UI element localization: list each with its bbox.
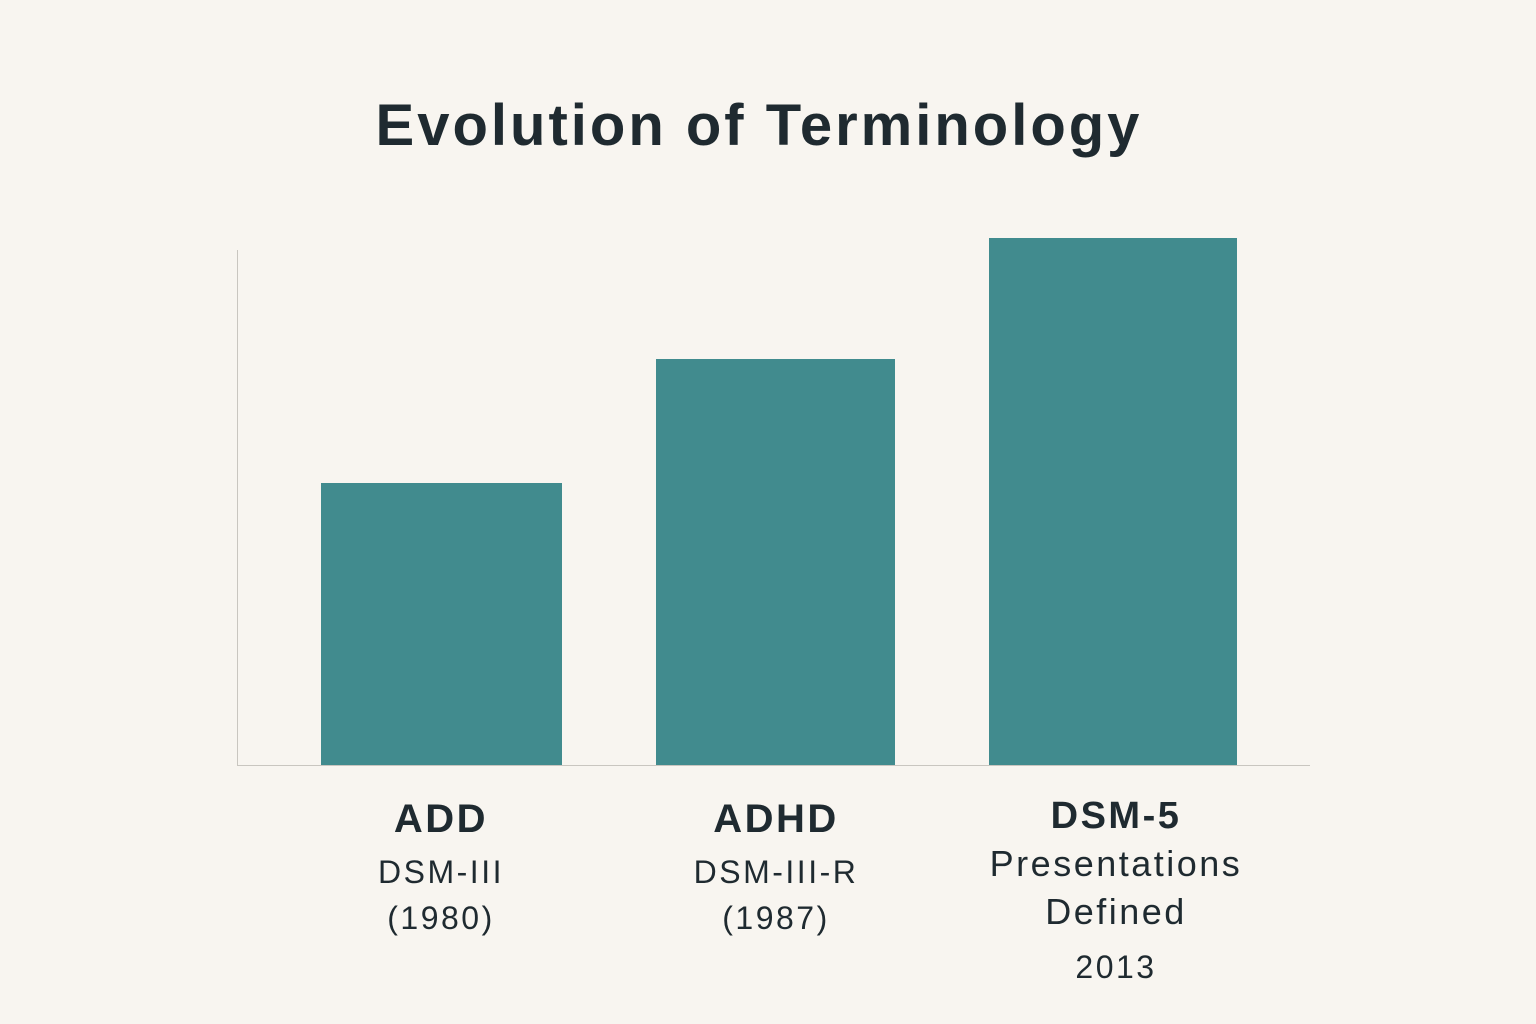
title: Evolution of Terminology (376, 93, 1142, 158)
bar: ADHD (656, 359, 895, 765)
label: DSM-5: DSM-5 (1051, 795, 1181, 837)
label: ADHD: (1987) (722, 900, 830, 936)
label: DSM-5: 2013 (1075, 949, 1157, 985)
label: ADD: (1980) (387, 900, 495, 936)
label: ADHD: DSM-III-R (694, 854, 858, 890)
bar chart (237, 238, 1310, 766)
label: ADD (378, 797, 504, 936)
y axis (237, 250, 238, 765)
label: ADD: DSM-III (378, 854, 504, 890)
x axis (237, 765, 1310, 766)
label: DSM-5 (990, 795, 1242, 985)
label: ADHD: ADHD (713, 797, 839, 841)
label: DSM-5: Presentations (990, 843, 1242, 884)
label: ADHD (694, 797, 858, 936)
label: ADD: ADD (394, 797, 488, 841)
bar: ADD (321, 483, 562, 765)
bar: DSM-5 (989, 238, 1237, 765)
label: DSM-5: Defined (1045, 891, 1187, 932)
